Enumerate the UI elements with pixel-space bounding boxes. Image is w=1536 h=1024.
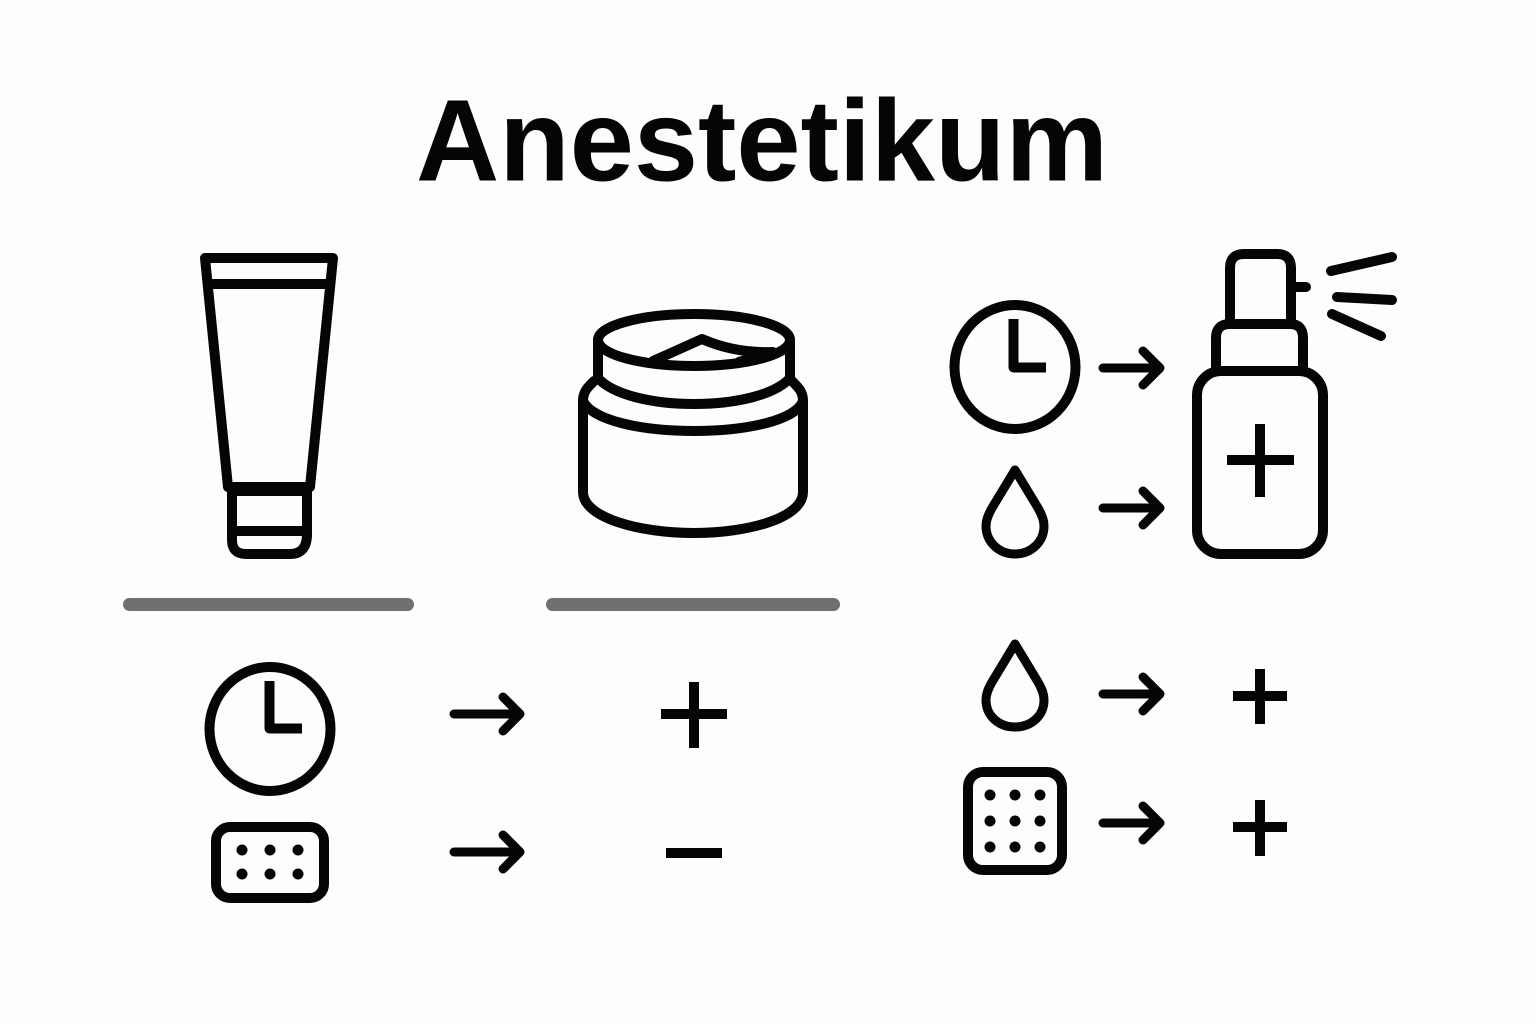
icon: clock (left) (210, 667, 330, 791)
arrow: drop to plus (1103, 677, 1160, 711)
icon: spray bottle (1197, 254, 1392, 554)
divider: jar (546, 598, 840, 611)
arrow: clock to spray (1103, 351, 1160, 385)
arrow: patch to plus (1103, 806, 1160, 840)
icon: skin patch wide (216, 827, 324, 898)
icon: minus (666, 848, 722, 858)
divider: tube (123, 598, 414, 611)
icon: skin patch square (968, 772, 1062, 870)
icon: clock (top right) (954, 305, 1076, 429)
arrow: patch to minus (454, 835, 520, 869)
icon: drop (lower right) (986, 644, 1044, 727)
icon: plus (patch row) (1233, 800, 1287, 856)
icon: cream jar (583, 314, 803, 533)
title: Anestetikum (416, 76, 1108, 206)
arrow: clock to plus (454, 697, 520, 731)
icon: plus (661, 682, 727, 748)
arrow: drop to spray (1103, 491, 1160, 525)
icon: ointment tube (205, 258, 333, 554)
icon: plus (drop row) (1233, 669, 1287, 724)
icon: drop (top right) (986, 470, 1044, 554)
